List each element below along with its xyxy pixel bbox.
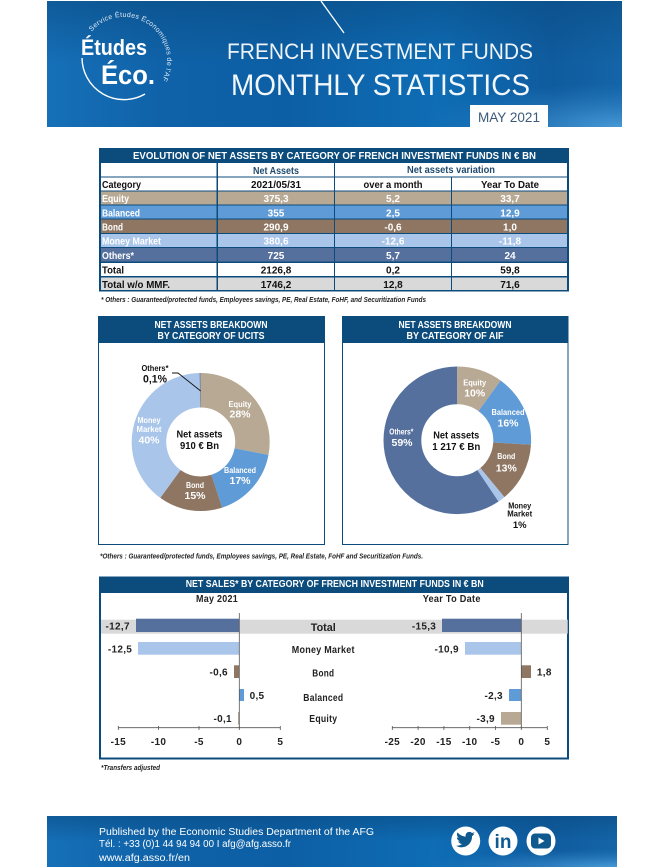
category labels: Bond (312, 668, 334, 680)
donut chart: UCITS (149, 390, 252, 494)
axis labels: -25 (385, 737, 400, 748)
row: Bond (101, 220, 567, 234)
center label: AIF: Net assets (433, 430, 479, 442)
row: Bond: -0,6 (384, 222, 402, 234)
header row 2: 2021/05/31 (251, 180, 301, 191)
category labels: Total (311, 622, 336, 634)
row: Total: 0,2 (386, 266, 400, 276)
panel heading: NET ASSETS BREAKDOWN (154, 320, 268, 331)
row: Others: Others* (102, 251, 134, 262)
row: Money Market: 380,6 (263, 236, 289, 248)
row: Money Market: Money Market (102, 236, 162, 248)
header row 1: Net Assets (253, 166, 299, 177)
panel heading: BY CATEGORY OF UCITS (158, 331, 265, 342)
logo: Études Éco: Études (81, 35, 147, 60)
row: Others: 5,7 (386, 251, 400, 262)
axis labels: 5 (277, 737, 283, 748)
donut labels: AIF: Balanced (492, 407, 524, 417)
center label: UCITS (176, 428, 223, 452)
donut labels: UCITS: 15% (184, 490, 206, 502)
axis labels: -15 (111, 737, 126, 748)
donut chart: AIF (402, 385, 512, 495)
publisher text (98, 826, 374, 864)
footer background (47, 816, 617, 867)
row: Money Market: -12,6 (382, 236, 405, 248)
value labels: -12,7 (106, 622, 130, 632)
donut labels: AIF: 59% (391, 437, 413, 449)
panel frame (100, 578, 568, 758)
header row 2: Year To Date (481, 180, 539, 191)
row: Balanced: 12,9 (500, 208, 520, 220)
donut labels: AIF: Bond (497, 451, 515, 461)
axis labels (385, 737, 550, 748)
donut labels: UCITS: Equity (228, 399, 252, 409)
row: Money Market (101, 234, 567, 248)
axis labels: -20 (410, 737, 426, 748)
row: Balanced: Balanced (102, 208, 140, 220)
axis labels: -5 (194, 737, 204, 748)
header banner (47, 1, 622, 127)
row: Total (101, 263, 567, 276)
publisher text: Published by the Economic Studies Department of the AFG (99, 826, 374, 838)
axis (118, 613, 280, 730)
total highlight band (101, 620, 568, 634)
category labels (292, 622, 355, 725)
logo: Études Éco (81, 11, 172, 100)
donut labels: UCITS (136, 399, 256, 502)
title line 2: MONTHLY STATISTICS (231, 69, 530, 102)
row: Equity: Equity (102, 194, 129, 205)
callout: Money Market 1%: 1% (513, 520, 527, 531)
value labels: -0,1 (213, 714, 232, 725)
row: Total w/o MMF: 71,6 (500, 280, 520, 291)
row: Total w/o MMF: 1746,2 (261, 280, 292, 291)
header row 2: Category (102, 180, 141, 191)
row: Others: 24 (504, 251, 516, 262)
value labels: -15,3 (412, 622, 436, 632)
callout: Others 0,1%: Others* (142, 363, 169, 373)
axis labels (111, 737, 283, 748)
row: Total: 59,8 (500, 266, 520, 276)
row: Equity: 33,7 (500, 194, 520, 205)
date badge: MAY 2021 (478, 109, 540, 125)
footer banner (47, 816, 617, 867)
breakdown footnote: *Others : Guaranteed/protected funds, Employees savings, PE, Real Estate, FoHF and Securitization Funds. (100, 554, 423, 560)
value labels: -3,9 (476, 714, 495, 725)
donut labels: UCITS: Balanced (224, 465, 256, 475)
value labels (106, 622, 265, 725)
axis labels: -10 (151, 737, 166, 748)
donut labels: UCITS: 40% (138, 434, 160, 446)
icon: linkedin (488, 826, 518, 856)
donut labels: AIF: 13% (496, 462, 517, 474)
panel heading: BY CATEGORY OF AIF (406, 331, 504, 342)
table frame (99, 148, 569, 292)
panel heading: NET SALES* BY CATEGORY OF FRENCH INVESTMENT FUNDS IN € BN (186, 579, 484, 590)
panel frame (98, 316, 324, 544)
title line 1: FRENCH INVESTMENT FUNDS (227, 39, 533, 64)
row: Money Market: -11,8 (499, 236, 522, 248)
value labels: -12,5 (108, 644, 132, 656)
callout: Money Market 1%: Market (507, 508, 532, 518)
callout: Others 0,1%: 0,1% (143, 374, 167, 386)
header row 2: over a month (364, 180, 422, 191)
value labels: 0,5 (250, 691, 265, 702)
donut labels: AIF: Equity (463, 378, 486, 388)
donut labels: UCITS: Market (136, 424, 162, 434)
axis labels: -15 (436, 737, 452, 748)
row: Balanced: 355 (268, 208, 285, 220)
category labels: Money Market (292, 645, 355, 656)
category labels: Equity (309, 714, 337, 725)
donut labels: UCITS: 17% (229, 475, 251, 487)
category labels: Balanced (303, 693, 343, 704)
center label: UCITS: 910 € Bn (180, 440, 219, 452)
panel frame (342, 316, 568, 544)
axis labels: -5 (491, 737, 500, 748)
table footnote: * Others : Guaranteed/protected funds, Employees savings, PE, Real Estate, FoHF, and Securitization Funds (101, 297, 426, 304)
row: Bond: Bond (102, 222, 123, 234)
donut labels: AIF: 10% (464, 388, 486, 400)
value labels: 1,8 (537, 668, 552, 678)
table title: EVOLUTION OF NET ASSETS BY CATEGORY OF FRENCH INVESTMENT FUNDS IN € BN (133, 151, 536, 162)
value labels: -2,3 (484, 691, 503, 702)
donut labels: AIF (389, 378, 524, 474)
row: Total w/o MMF (101, 278, 567, 291)
publisher text: Tél. : +33 (0)1 44 94 94 00 I afg@afg.asso.fr (99, 839, 292, 850)
panel heading (99, 577, 569, 593)
callout: Money Market 1%: Money (508, 500, 531, 510)
axis labels: 0 (518, 737, 524, 748)
panel: net sales (99, 577, 569, 758)
row: Bond: 290,9 (263, 222, 289, 234)
date badge (470, 105, 548, 127)
row: Equity (101, 192, 567, 205)
publisher text: www.afg.asso.fr/en (98, 853, 190, 864)
header row 1 (101, 163, 567, 177)
net assets table (99, 148, 569, 292)
panel heading: NET ASSETS BREAKDOWN (398, 320, 512, 331)
value labels: -10,9 (435, 644, 459, 656)
value labels: -0,6 (209, 668, 228, 678)
bars (136, 619, 244, 725)
row: Balanced (101, 206, 567, 220)
row: Total: Total (102, 266, 124, 276)
row: Others: 725 (268, 251, 285, 262)
icon: twitter (451, 826, 480, 856)
panel: AIF breakdown (342, 316, 568, 544)
donut labels: AIF: Others* (389, 426, 414, 436)
axis labels: -10 (462, 737, 478, 748)
bars (442, 619, 531, 725)
panel heading (98, 316, 325, 343)
header row 1: Net assets variation (407, 165, 495, 176)
row: Balanced: 2,5 (386, 208, 400, 220)
center label: AIF (432, 430, 480, 453)
banner background (47, 1, 622, 127)
chart title: Year To Date (423, 594, 481, 605)
donut labels: UCITS: 28% (229, 408, 251, 420)
row: Total: 2126,8 (261, 266, 292, 276)
row: Others (101, 248, 567, 262)
axis (392, 613, 547, 730)
axis labels: 0 (236, 737, 242, 748)
row: Total w/o MMF: Total w/o MMF. (102, 280, 170, 291)
icon: youtube (526, 826, 556, 856)
chart: May 2021 (106, 594, 283, 748)
header row 2 (101, 178, 567, 191)
center label: UCITS: Net assets (176, 428, 223, 440)
callout: Others 0,1% (142, 363, 201, 391)
diagonal accent line (321, 1, 344, 33)
row: Bond: 1,0 (503, 222, 517, 234)
donut labels: UCITS: Bond (186, 480, 204, 490)
callout: Money Market 1% (507, 500, 532, 531)
chart title: May 2021 (196, 594, 238, 605)
donut labels: AIF: 16% (497, 418, 519, 430)
row: Equity: 375,3 (263, 194, 289, 205)
center label: AIF: 1 217 € Bn (432, 441, 480, 453)
donut labels: UCITS: Money (138, 415, 161, 425)
panel heading (342, 316, 568, 343)
chart: Year To Date (385, 594, 552, 748)
net sales footnote: *Transfers adjusted (101, 765, 161, 772)
logo: Études Éco: Éco. (101, 59, 155, 90)
axis labels: 5 (544, 737, 550, 748)
row: Equity: 5,2 (386, 194, 400, 205)
row: Total w/o MMF: 12,8 (383, 280, 403, 291)
value labels (412, 622, 552, 725)
panel: UCITS breakdown (98, 316, 325, 544)
icon: linkedin: in (495, 832, 511, 853)
